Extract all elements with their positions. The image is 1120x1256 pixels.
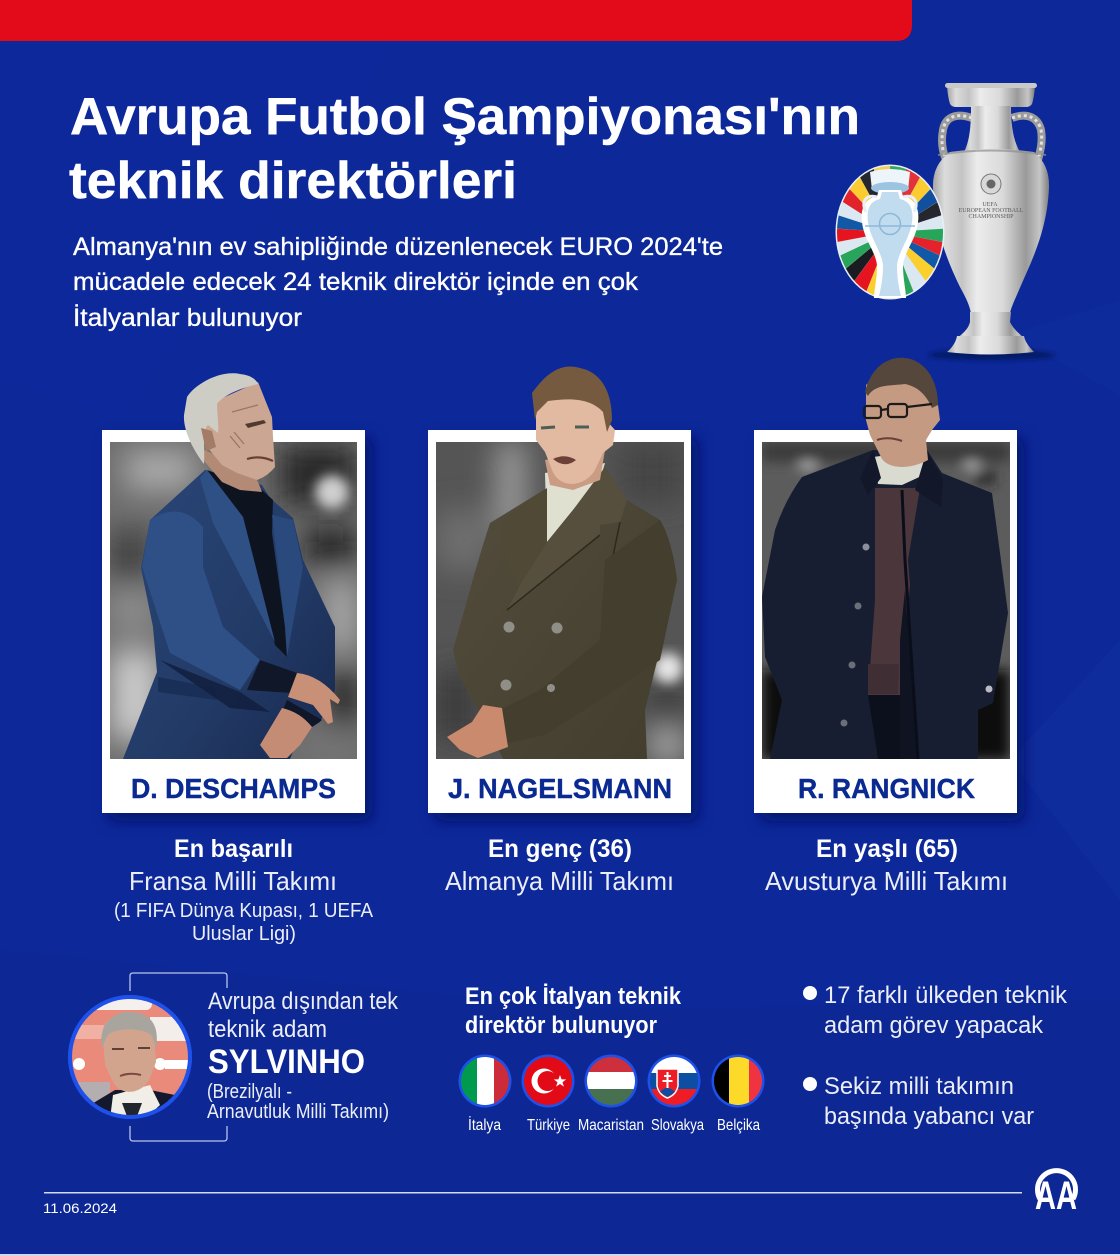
bullet: 17 countries: adam görev yapacak <box>824 1012 1044 1039</box>
flag labels <box>468 1115 760 1134</box>
text block: Rangnick caption: En yaşlı (65) <box>816 835 958 863</box>
text block: Nagelsmann caption: En genç (36) <box>488 835 632 863</box>
flag: Italy <box>458 1054 512 1108</box>
card frame <box>754 430 1017 813</box>
text block: Deschamps caption: Uluslar Ligi) <box>192 923 296 945</box>
flag labels: Türkiye <box>527 1117 570 1134</box>
text <box>207 988 399 1123</box>
title: teknik direktörleri <box>69 152 517 210</box>
icon: AA logo: AA <box>1035 1174 1077 1218</box>
bullet: foreign coaches: başında yabancı var <box>824 1103 1034 1130</box>
text: Arnavutluk Milli Takımı) <box>207 1101 389 1123</box>
icon: silver trophy: CHAMPIONSHIP <box>968 214 1014 220</box>
icon: silver trophy: UEFA <box>982 202 998 208</box>
panel: Italian coaches <box>458 983 764 1134</box>
title <box>69 88 860 210</box>
bullet: foreign coaches: Sekiz milli takımın <box>824 1073 1014 1100</box>
name: D. DESCHAMPS <box>131 773 336 804</box>
text: Avrupa dışından tek <box>208 988 399 1015</box>
card frame <box>428 430 691 813</box>
photo background <box>762 442 1010 760</box>
panel: Nagelsmann card <box>428 367 691 813</box>
icon: EURO 2024 logo <box>836 164 944 300</box>
portrait: Sylvinho <box>68 995 195 1119</box>
title: Avrupa Futbol Şampiyonası'nın <box>70 88 860 146</box>
panel: Rangnick card <box>754 358 1017 813</box>
subtitle: Almanya'nın ev sahipliğinde düzenlenecek EURO 2024'te <box>73 233 723 261</box>
icon: silver trophy <box>928 83 1056 360</box>
text block: Rangnick caption: Avusturya Milli Takımı <box>765 866 1008 896</box>
portrait frame brackets <box>130 973 227 1141</box>
card frame <box>102 430 365 813</box>
bullet: 17 countries <box>803 982 1068 1039</box>
text block: Deschamps caption: En başarılı <box>174 835 293 863</box>
text: SYLVINHO <box>208 1043 365 1081</box>
flag: Hungary <box>584 1054 638 1108</box>
date: 11.06.2024 <box>43 1200 117 1216</box>
icon: silver trophy: EUROPEAN FOOTBALL <box>959 208 1024 214</box>
text block: Deschamps caption: (1 FIFA Dünya Kupası, 1 UEFA <box>114 900 374 922</box>
text: teknik adam <box>208 1016 327 1043</box>
bullet: 17 countries: 17 farklı ülkeden teknik <box>824 982 1068 1009</box>
heading: En çok İtalyan teknik <box>465 983 682 1010</box>
text block: Deschamps caption: Fransa Milli Takımı <box>129 866 337 896</box>
icon: AA logo <box>1035 1171 1077 1218</box>
photo background <box>110 442 357 760</box>
photo background <box>436 442 684 760</box>
portrait: Deschamps <box>123 373 340 759</box>
portrait: Rangnick <box>762 358 1008 759</box>
flag: Belgium <box>712 1054 764 1108</box>
text block: Rangnick caption <box>765 835 1008 896</box>
subtitle: İtalyanlar bulunuyor <box>73 303 302 332</box>
name: J. NAGELSMANN <box>448 773 672 804</box>
panel: Deschamps card <box>102 373 365 813</box>
bullet: foreign coaches <box>803 1073 1034 1130</box>
heading: direktör bulunuyor <box>465 1012 657 1039</box>
flag: Slovakia <box>648 1054 700 1108</box>
subtitle <box>73 233 723 332</box>
heading <box>465 983 682 1039</box>
portrait: Nagelsmann <box>447 367 677 759</box>
flag labels: Slovakya <box>651 1117 704 1134</box>
text block: Deschamps caption <box>114 835 374 945</box>
top red banner <box>0 0 912 41</box>
name: R. RANGNICK <box>798 773 975 804</box>
flag labels: Macaristan <box>578 1117 644 1134</box>
panel: Sylvinho <box>68 973 399 1141</box>
text block: Nagelsmann caption: Almanya Milli Takımı <box>445 866 674 896</box>
flag labels: İtalya <box>468 1115 501 1134</box>
footer rule <box>44 1192 1022 1194</box>
text block: Nagelsmann caption <box>445 835 674 896</box>
flag: Turkey <box>522 1054 574 1108</box>
text: (Brezilyalı - <box>207 1081 292 1103</box>
subtitle: mücadele edecek 24 teknik direktör içinde en çok <box>73 268 639 296</box>
flag labels: Belçika <box>717 1117 760 1134</box>
